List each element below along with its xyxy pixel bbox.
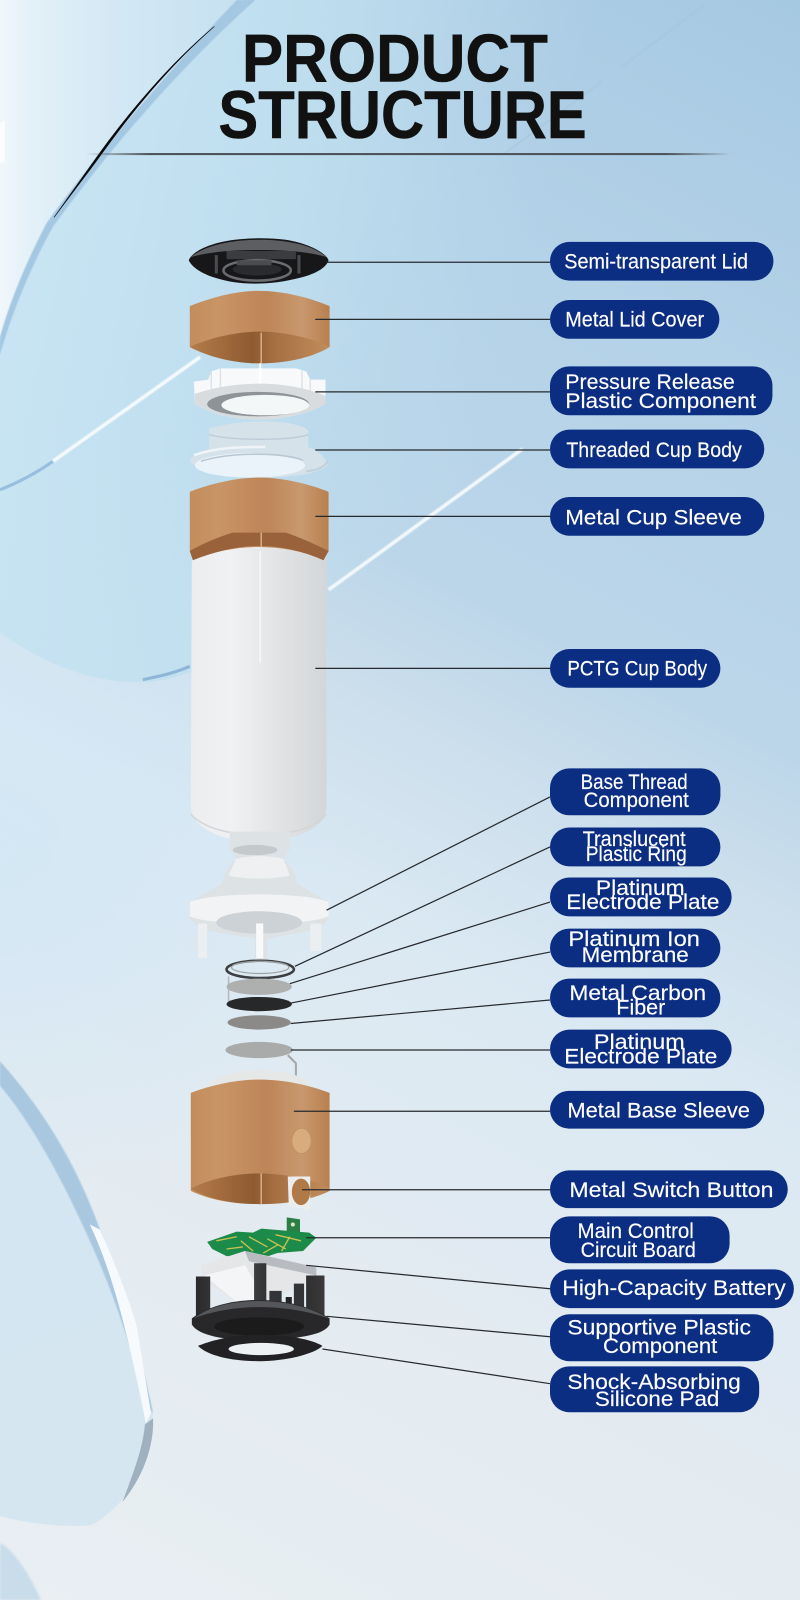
label: Shock-Absorbing Silicone Pad — [550, 1366, 759, 1412]
title divider — [86, 153, 731, 155]
part: platinum electrode plate lower — [226, 1042, 296, 1078]
title: PRODUCT — [242, 22, 548, 97]
label: Supportive Plastic Component: Supportive Plastic — [567, 1316, 751, 1340]
label: Platinum Electrode Plate (lower): Platinum — [594, 1030, 685, 1054]
leader lines — [290, 262, 550, 1384]
label: High-Capacity Battery — [550, 1269, 794, 1308]
label: Platinum Electrode Plate — [550, 876, 732, 916]
label: Translucent Plastic Ring: Plastic Ring — [586, 842, 687, 866]
label: Platinum Ion Membrane: Platinum Ion — [568, 927, 700, 951]
label: Threaded Cup Body — [550, 430, 764, 468]
label: High-Capacity Battery: High-Capacity Battery — [562, 1276, 786, 1300]
label: Threaded Cup Body: Threaded Cup Body — [566, 438, 742, 462]
label: Platinum Ion Membrane: Membrane — [582, 943, 689, 967]
part: metal carbon fiber — [228, 1015, 291, 1030]
label: Pressure Release Plastic Component — [550, 366, 772, 415]
label: Metal Lid Cover: Metal Lid Cover — [565, 308, 704, 332]
label: Pressure Release Plastic Component: Pressure Release — [565, 370, 735, 394]
label: PCTG Cup Body: PCTG Cup Body — [567, 657, 707, 681]
part: shock-absorbing silicone pad — [198, 1335, 322, 1361]
part: base thread component — [190, 832, 329, 959]
label: Metal Switch Button — [550, 1170, 788, 1208]
label: Base Thread Component — [550, 768, 720, 815]
label: Supportive Plastic Component — [550, 1314, 773, 1361]
part: semi-transparent lid — [189, 238, 329, 284]
label: Main Control Circuit Board: Circuit Board — [581, 1238, 696, 1262]
part: metal lid cover — [190, 291, 330, 363]
label: Platinum Electrode Plate (lower) — [550, 1030, 732, 1068]
label: Semi-transparent Lid: Semi-transparent Lid — [564, 249, 748, 273]
label: Metal Base Sleeve: Metal Base Sleeve — [567, 1098, 750, 1122]
part: metal cup sleeve — [190, 478, 329, 560]
label: Translucent Plastic Ring: Translucent — [583, 827, 686, 851]
part: platinum ion membrane — [227, 997, 292, 1011]
part: metal base sleeve — [191, 1070, 330, 1204]
part: pressure release plastic component — [194, 363, 326, 419]
label: Platinum Electrode Plate (lower): Electrode Plate — [564, 1044, 717, 1068]
title: STRUCTURE — [218, 78, 587, 153]
label: Translucent Plastic Ring — [550, 827, 720, 866]
label: Shock-Absorbing Silicone Pad: Shock-Absorbing — [567, 1370, 741, 1394]
label: Metal Cup Sleeve: Metal Cup Sleeve — [565, 505, 742, 529]
label: Main Control Circuit Board: Main Control — [578, 1219, 694, 1243]
part: high-capacity battery — [200, 1251, 316, 1302]
part: translucent plastic ring — [227, 961, 294, 978]
part: platinum electrode plate — [227, 977, 292, 1002]
part: PCTG cup body — [191, 538, 327, 842]
label: Metal Carbon Fiber: Metal Carbon — [569, 981, 706, 1005]
label: Metal Carbon Fiber — [550, 979, 720, 1019]
label: Metal Cup Sleeve — [550, 497, 764, 536]
label: Base Thread Component: Base Thread — [581, 770, 688, 794]
exploded product diagram — [189, 238, 330, 1361]
label: Platinum Electrode Plate: Platinum — [596, 876, 685, 900]
label: Metal Switch Button: Metal Switch Button — [569, 1178, 773, 1202]
part: supportive plastic component — [192, 1263, 330, 1341]
label: Platinum Electrode Plate: Electrode Plate — [566, 890, 719, 914]
part: metal switch button — [288, 1177, 310, 1210]
label: Shock-Absorbing Silicone Pad: Silicone Pad — [595, 1387, 719, 1411]
label: Platinum Ion Membrane — [550, 927, 720, 967]
label: Semi-transparent Lid — [550, 242, 773, 281]
label: Main Control Circuit Board — [550, 1216, 730, 1263]
label: Metal Carbon Fiber: Fiber — [616, 995, 665, 1019]
part: threaded cup body — [190, 421, 328, 478]
label: Metal Lid Cover — [550, 300, 719, 339]
label: Supportive Plastic Component: Component — [603, 1334, 717, 1358]
label: Pressure Release Plastic Component: Plastic Component — [565, 389, 756, 413]
title — [218, 22, 587, 153]
label: PCTG Cup Body — [550, 649, 720, 688]
part: main control circuit board — [207, 1217, 316, 1257]
label: Metal Base Sleeve — [550, 1091, 764, 1129]
label: Base Thread Component: Component — [584, 788, 689, 812]
